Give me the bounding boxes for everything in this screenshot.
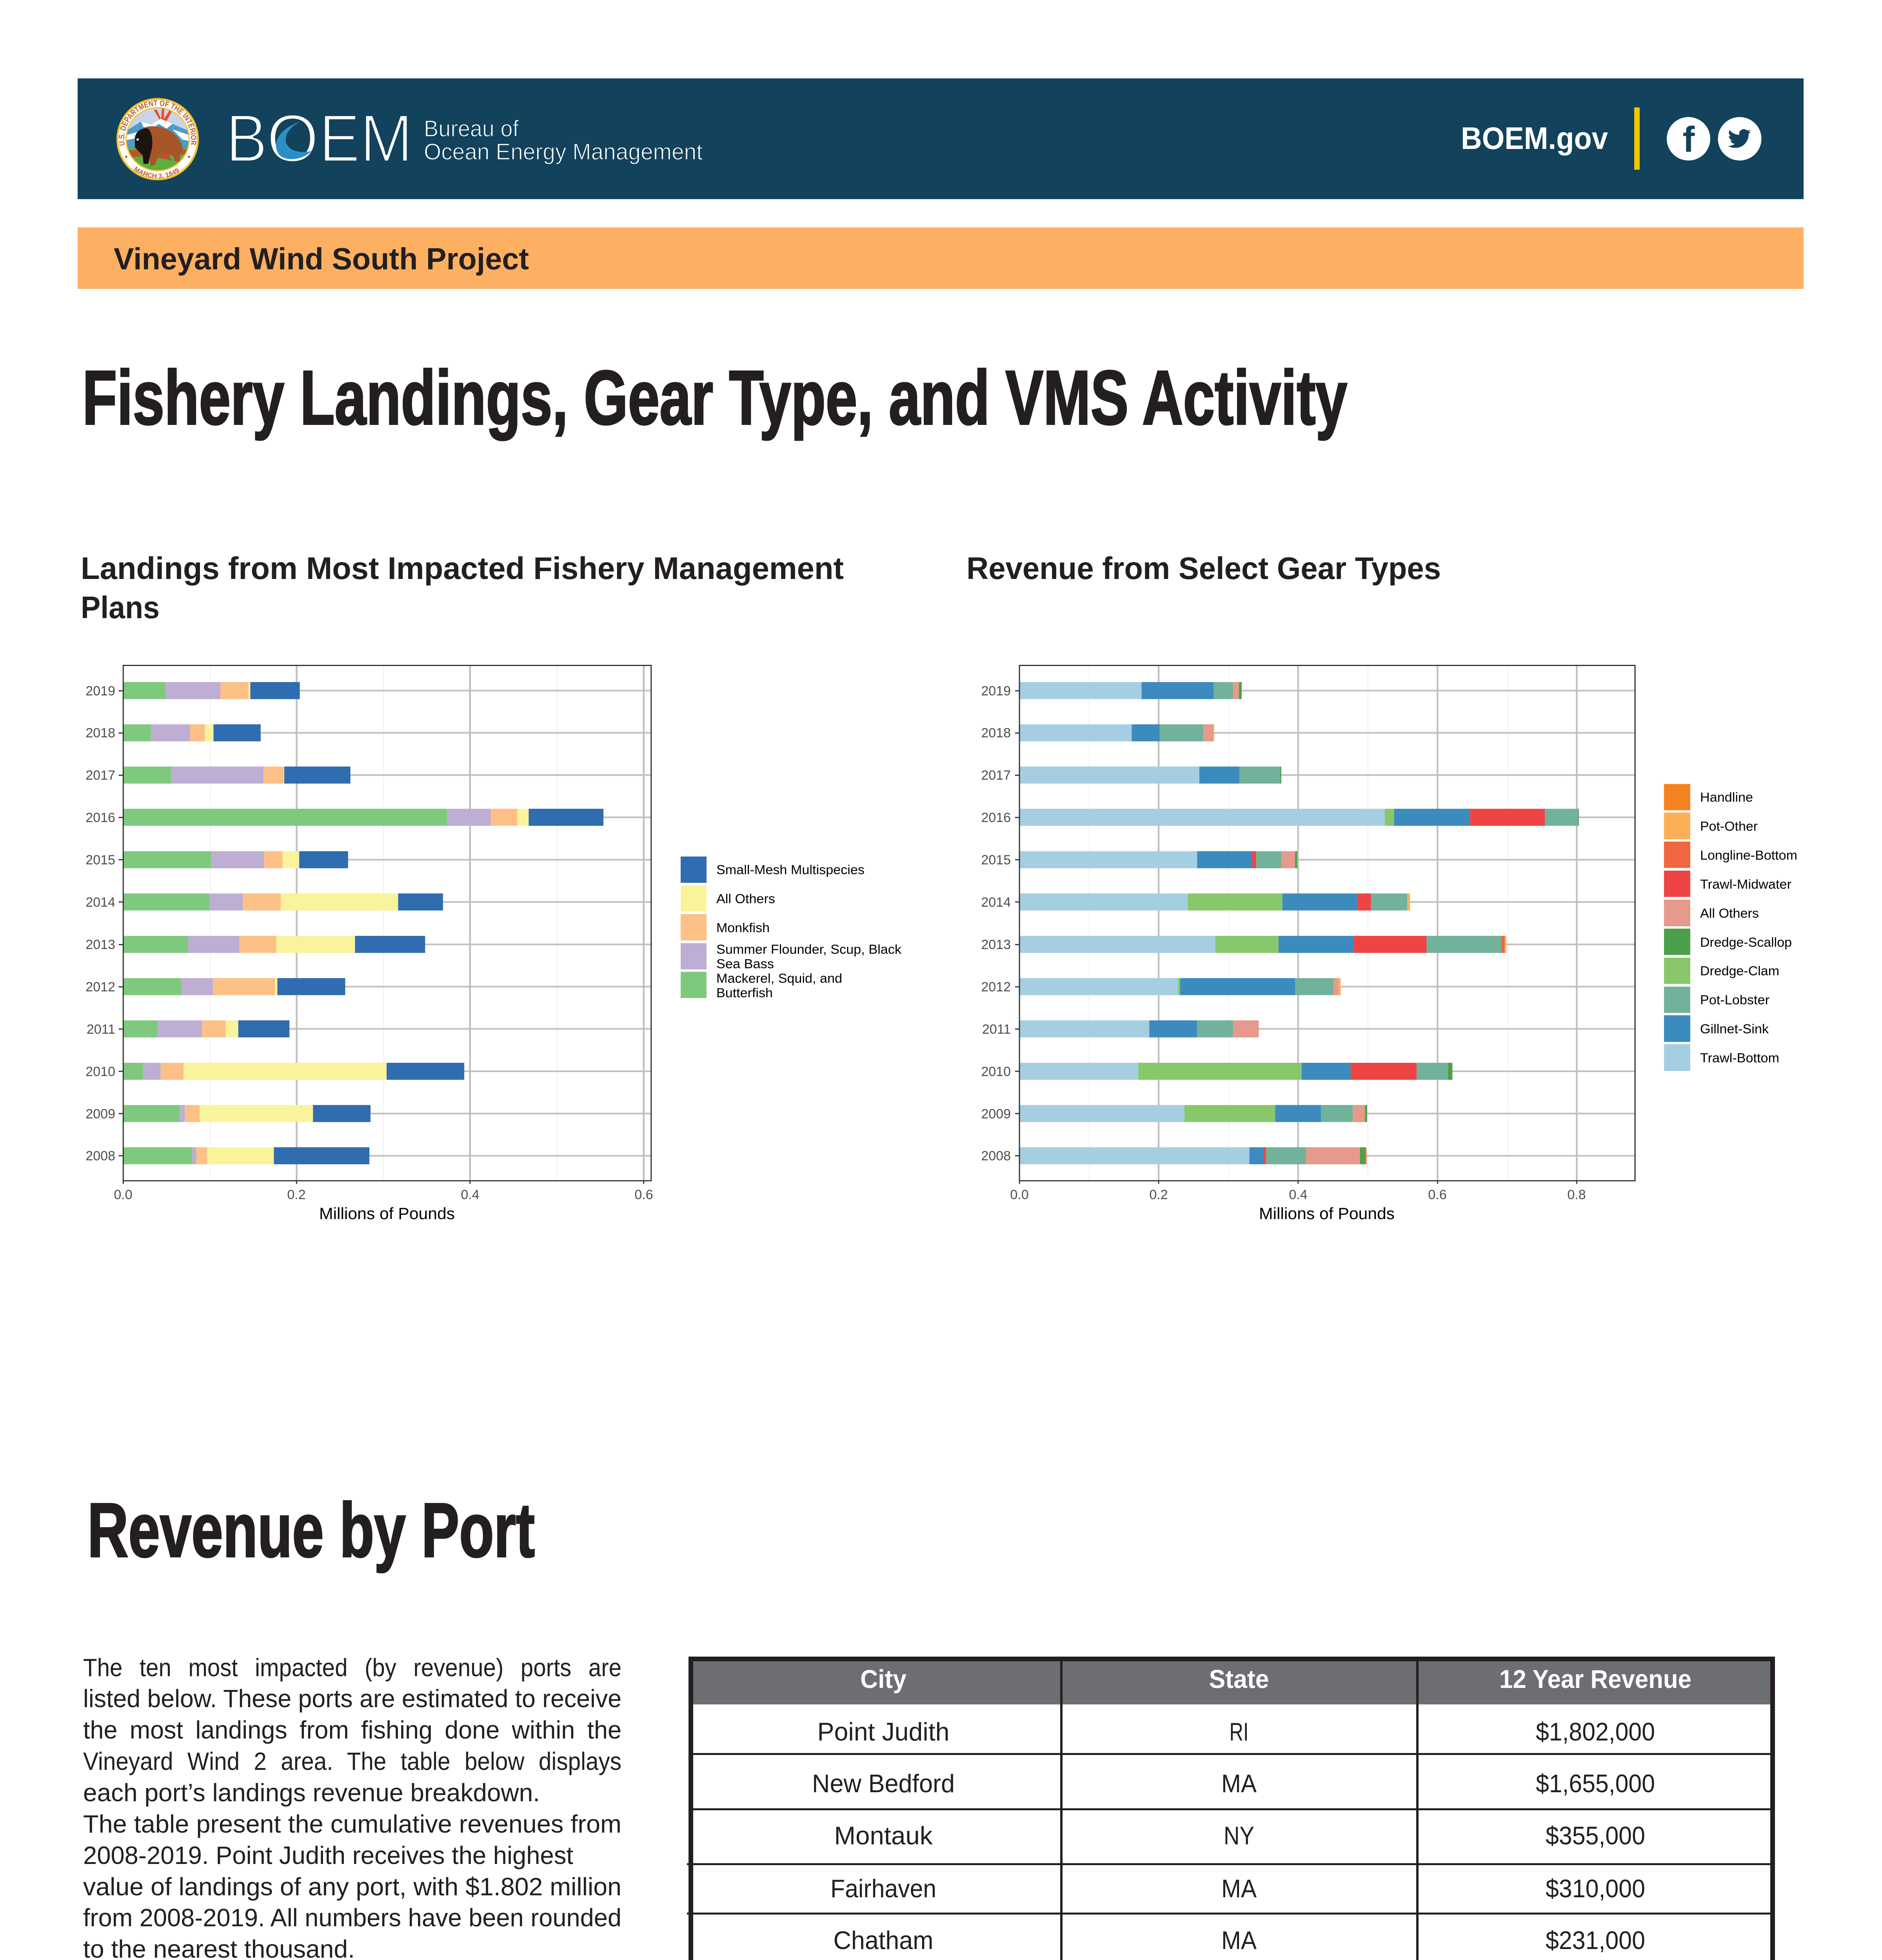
legend: revenue: Dredge-Scallop — [1700, 935, 1792, 949]
bar: 2014 — [123, 893, 443, 911]
y axis labels: landings: 2016 — [85, 810, 115, 825]
legend: revenue: Pot-Other — [1700, 819, 1758, 833]
header banner — [78, 78, 1804, 199]
legend: landings: Summer Flounder, Scup, Black — [716, 942, 902, 956]
row: Point Judith: RI — [1230, 1717, 1248, 1746]
bar: 2011 — [1019, 1020, 1259, 1037]
bar: 2015 — [1019, 851, 1297, 868]
y axis labels: revenue: 2008 — [981, 1149, 1011, 1163]
legend: revenue: Dredge-Clam — [1700, 964, 1779, 978]
row: Point Judith: $1,802,000 — [1536, 1717, 1655, 1746]
row: Montauk: $355,000 — [1546, 1821, 1645, 1850]
y axis labels: landings: 2008 — [85, 1149, 115, 1163]
row: Point Judith — [817, 1717, 1655, 1746]
y axis labels: revenue: 2014 — [981, 895, 1011, 910]
bar: 2014 — [1019, 893, 1410, 911]
x axis labels: landings: 0.6 — [634, 1187, 653, 1202]
row: New Bedford: $1,655,000 — [1536, 1769, 1655, 1798]
row: Fairhaven: $310,000 — [1546, 1874, 1645, 1903]
yellow divider — [1634, 107, 1640, 170]
y axis labels: revenue: 2013 — [981, 937, 1011, 952]
text block: port description: The table present the cumulative revenues from — [83, 1810, 621, 1838]
y axis labels: revenue: 2018 — [981, 726, 1011, 740]
bar: 2011 — [123, 1020, 289, 1037]
y axis labels: landings: 2011 — [87, 1022, 115, 1037]
logo: BOEM wordmark: O — [267, 101, 319, 176]
text block: port description: 2008-2019. Point Judith receives the highest — [83, 1841, 573, 1869]
x axis labels: revenue — [1010, 1187, 1586, 1202]
x axis labels: landings: 0.2 — [287, 1187, 306, 1202]
y axis labels: revenue — [981, 684, 1011, 1163]
legend: revenue: Gillnet-Sink — [1700, 1022, 1769, 1036]
table header row: 12 Year Revenue — [1499, 1664, 1691, 1693]
bar: 2009 — [123, 1105, 371, 1122]
legend: landings: All Others — [716, 891, 775, 906]
bar: 2018 — [1019, 724, 1214, 741]
bar: 2013 — [123, 936, 425, 953]
bar: 2008 — [123, 1147, 369, 1164]
logo text: Bureau of Ocean Energy Management: Bureau of — [424, 116, 519, 142]
icon: facebook: f — [1683, 120, 1695, 160]
bar: 2012 — [1019, 978, 1341, 995]
logo text: Bureau of Ocean Energy Management: Ocean Energy Management — [424, 139, 703, 165]
x axis labels: revenue: 0.4 — [1289, 1187, 1308, 1202]
y axis labels: revenue: 2016 — [981, 810, 1011, 825]
text block: port description: from 2008-2019. All numbers have been rounded — [83, 1904, 621, 1932]
bar: 2010 — [123, 1063, 464, 1080]
row: Chatham — [834, 1926, 1645, 1955]
icon: twitter — [1718, 117, 1761, 161]
y axis labels: landings: 2013 — [85, 937, 115, 952]
legend: landings: Butterfish — [716, 985, 773, 1000]
row: Montauk — [834, 1821, 1645, 1850]
y axis labels: landings: 2010 — [85, 1064, 115, 1079]
bar: 2018 — [123, 724, 261, 741]
table header row: State — [1209, 1664, 1269, 1693]
text block: port description: The ten most impacted (by revenue) ports are — [83, 1653, 621, 1682]
x axis labels: revenue: 0.8 — [1567, 1187, 1586, 1202]
x axis labels: landings: 0.4 — [461, 1187, 480, 1202]
x axis labels: landings — [114, 1187, 653, 1202]
icon: Department of the Interior seal — [116, 98, 199, 180]
icon: Department of the Interior seal: MARCH 3, 1849 — [133, 165, 180, 180]
text block: port description — [83, 1653, 621, 1960]
logo: BOEM wordmark — [226, 101, 413, 176]
y axis labels: landings: 2015 — [85, 853, 115, 867]
heading: revenue chart: Revenue from Select Gear Types — [966, 551, 1441, 586]
legend: revenue: Handline — [1700, 790, 1753, 804]
bar: 2017 — [1019, 766, 1281, 784]
bar: 2015 — [123, 851, 348, 868]
bar: 2008 — [1019, 1147, 1366, 1164]
chart: revenue stacked bars — [981, 665, 1797, 1223]
y axis labels: revenue: 2017 — [981, 768, 1011, 783]
heading: landings chart: Landings from Most Impacted Fishery Management — [81, 551, 844, 586]
row: Fairhaven — [830, 1874, 1645, 1903]
row: Chatham: MA — [1221, 1926, 1257, 1955]
y axis labels: landings: 2019 — [85, 684, 115, 699]
bar: 2010 — [1019, 1063, 1452, 1080]
bar: 2017 — [123, 766, 351, 784]
y axis labels: revenue: 2015 — [981, 853, 1011, 867]
legend: revenue: Pot-Lobster — [1700, 993, 1769, 1007]
legend: landings — [681, 857, 902, 1000]
heading: revenue by port: Revenue by Port — [87, 1487, 535, 1573]
row: New Bedford: New Bedford — [812, 1769, 955, 1798]
table: revenue by port — [687, 1659, 1773, 1960]
bar: 2013 — [1019, 936, 1506, 953]
icon: facebook — [1667, 117, 1710, 161]
logo: BOEM wordmark: E — [319, 101, 360, 176]
legend: landings: Sea Bass — [716, 956, 774, 971]
project banner — [78, 227, 1804, 289]
legend: landings: Mackerel, Squid, and — [716, 971, 842, 985]
bar: 2009 — [1019, 1105, 1367, 1122]
text block: port description: value of landings of any port, with $1.802 million — [83, 1873, 621, 1901]
y axis labels: revenue: 2011 — [982, 1022, 1011, 1037]
bar: 2016 — [123, 809, 603, 826]
text block: port description: each port’s landings revenue breakdown. — [83, 1779, 540, 1807]
y axis labels: landings: 2017 — [85, 768, 115, 783]
x axis title: landings: Millions of Pounds — [319, 1204, 455, 1223]
row: New Bedford: MA — [1221, 1769, 1257, 1798]
heading: landings chart: Plans — [81, 590, 160, 625]
heading: landings chart — [81, 551, 844, 625]
x axis title: revenue: Millions of Pounds — [1259, 1204, 1395, 1223]
project banner: Vineyard Wind South Project — [114, 241, 529, 276]
legend: revenue: All Others — [1700, 906, 1759, 920]
logo: BOEM wordmark: M — [360, 101, 413, 176]
table header row: City — [860, 1664, 906, 1693]
plot area: landings — [119, 665, 651, 1184]
legend: revenue: Trawl-Midwater — [1700, 877, 1791, 891]
y axis labels: revenue: 2012 — [981, 980, 1011, 995]
bar: 2019 — [1019, 682, 1242, 699]
x axis labels: landings: 0.0 — [114, 1187, 133, 1202]
x axis labels: revenue: 0.2 — [1149, 1187, 1168, 1202]
y axis labels: landings: 2009 — [85, 1107, 115, 1122]
bar: 2012 — [123, 978, 345, 995]
text block: port description: the most landings from fishing done within the — [83, 1716, 621, 1744]
table header row — [693, 1661, 1770, 1704]
y axis labels: revenue: 2009 — [981, 1107, 1011, 1122]
row: Fairhaven: Fairhaven — [830, 1874, 936, 1903]
row: Montauk: Montauk — [834, 1821, 933, 1850]
chart: landings stacked bars — [85, 665, 902, 1223]
y axis labels: revenue: 2010 — [981, 1064, 1011, 1079]
y axis labels: revenue: 2019 — [981, 684, 1011, 699]
row: Chatham: Chatham — [834, 1926, 933, 1955]
row: Point Judith: Point Judith — [817, 1717, 950, 1746]
y axis labels: landings: 2012 — [85, 980, 115, 995]
bar: 2016 — [1019, 809, 1579, 826]
legend: landings: Small-Mesh Multispecies — [716, 862, 865, 877]
x axis labels: revenue: 0.6 — [1428, 1187, 1447, 1202]
row: Chatham: $231,000 — [1546, 1926, 1645, 1955]
website link text: BOEM.gov — [1461, 121, 1608, 156]
bar: 2019 — [123, 682, 300, 699]
title: Fishery Landings, Gear Type, and VMS Activity — [82, 355, 1347, 441]
y axis labels: landings: 2018 — [85, 726, 115, 740]
y axis labels: landings: 2014 — [85, 895, 115, 910]
plot area: revenue — [1015, 665, 1635, 1184]
icon: Department of the Interior seal: U.S. DEPARTMENT OF THE INTERIOR — [118, 99, 198, 146]
x axis labels: revenue: 0.0 — [1010, 1187, 1029, 1202]
legend: landings: Monkfish — [716, 920, 770, 935]
logo: BOEM wordmark: B — [226, 101, 267, 176]
logo text: Bureau of Ocean Energy Management — [424, 116, 703, 165]
legend: revenue: Trawl-Bottom — [1700, 1051, 1779, 1065]
y axis labels: landings — [85, 684, 115, 1163]
row: New Bedford — [812, 1769, 1655, 1798]
row: Montauk: NY — [1224, 1821, 1254, 1850]
legend: revenue — [1664, 784, 1797, 1071]
text block: port description: Vineyard Wind 2 area. The table below displays — [83, 1747, 621, 1775]
row: Fairhaven: MA — [1221, 1874, 1257, 1903]
text block: port description: listed below. These ports are estimated to receive — [83, 1684, 621, 1713]
legend: revenue: Longline-Bottom — [1700, 848, 1797, 862]
